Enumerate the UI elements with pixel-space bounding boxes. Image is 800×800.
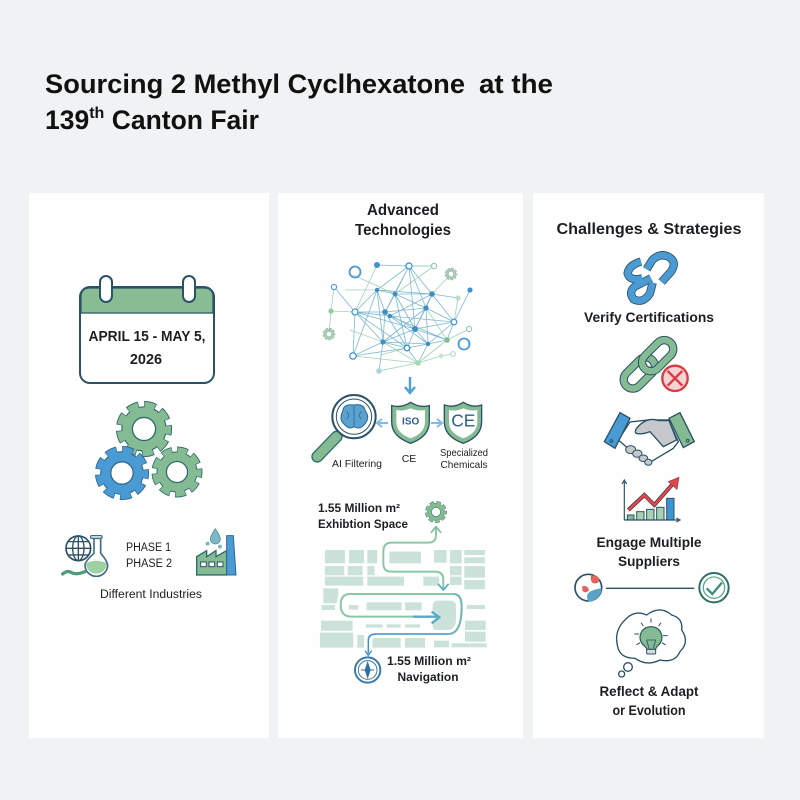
title: 139	[45, 105, 89, 135]
icon: ISO shield	[392, 402, 429, 443]
icon: small gear	[427, 503, 445, 521]
chart: rising bars with red arrow	[622, 477, 680, 522]
arrow: to CE	[431, 419, 442, 427]
icon: magnifier with brain	[317, 395, 376, 457]
heading: advanced technologies	[355, 202, 451, 239]
text: reflect and adapt: Reflect & Adapt	[600, 684, 699, 699]
text: exhibition space	[318, 503, 408, 531]
text: engage multiple suppliers: Engage Multiple	[596, 535, 702, 550]
icon: broken blue chain	[628, 255, 674, 301]
heading: challenges and strategies: Challenges & Strategies	[556, 221, 742, 238]
text: engage multiple suppliers: Suppliers	[618, 554, 680, 569]
text: phases: PHASE 1	[126, 542, 171, 554]
text: technology labels	[332, 447, 488, 471]
chart: exhibition floor map	[320, 527, 487, 655]
text: navigation	[387, 656, 471, 684]
text: reflect and adapt: or Evolution	[612, 703, 686, 718]
icon: handshake	[604, 413, 694, 465]
icon: calendar with dates	[80, 276, 214, 383]
panel: advanced technologies	[278, 193, 523, 738]
text: phases	[126, 542, 172, 570]
icon: calendar with dates: 2026	[130, 352, 162, 368]
chart: network diagram	[324, 262, 473, 374]
icon: compass	[355, 657, 380, 683]
text: navigation: 1.55 Million m²	[387, 656, 471, 668]
text: technology labels: AI Filtering	[332, 458, 382, 470]
text: technology labels: Chemicals	[440, 459, 488, 471]
heading: advanced technologies: Technologies	[355, 222, 451, 239]
text: reflect and adapt	[600, 684, 699, 718]
text: navigation: Navigation	[398, 672, 458, 684]
title: th	[89, 105, 104, 122]
panel: challenges and strategies	[533, 193, 764, 738]
icon: thought cloud with light bulb	[617, 610, 685, 677]
icon: green chain with red cross	[620, 336, 688, 392]
heading: advanced technologies: Advanced	[367, 202, 439, 219]
text: technology labels: CE	[402, 453, 416, 465]
text: verify certifications: Verify Certifications	[584, 310, 714, 325]
icon: CE shield: CE	[451, 410, 475, 430]
arrow: to AI filtering	[377, 419, 388, 427]
text: phases: PHASE 2	[126, 558, 172, 570]
icon: CE shield	[444, 402, 482, 443]
icon: connected globe and check	[575, 573, 729, 602]
text: technology labels: Specialized	[440, 447, 488, 459]
text: different industries: Different Industries	[100, 589, 202, 601]
title: Sourcing 2 Methyl Cyclhexatone	[45, 69, 465, 99]
arrow: down to filters	[405, 377, 415, 393]
text: exhibition space: 1.55 Million m²	[318, 503, 400, 515]
icon: three gears	[99, 405, 199, 496]
icon: ISO shield: ISO	[402, 417, 419, 428]
text: engage multiple suppliers	[596, 535, 702, 569]
panel: dates and industries	[29, 193, 269, 738]
icon: globe, flask and worm	[63, 536, 108, 576]
text: exhibition space: Exhibtion Space	[318, 519, 408, 531]
title	[45, 69, 553, 135]
title: Canton Fair	[104, 105, 259, 135]
icon: calendar with dates: APRIL 15 - MAY 5,	[88, 329, 206, 345]
icon: factory with drop	[197, 529, 236, 575]
title: at the	[479, 69, 553, 99]
